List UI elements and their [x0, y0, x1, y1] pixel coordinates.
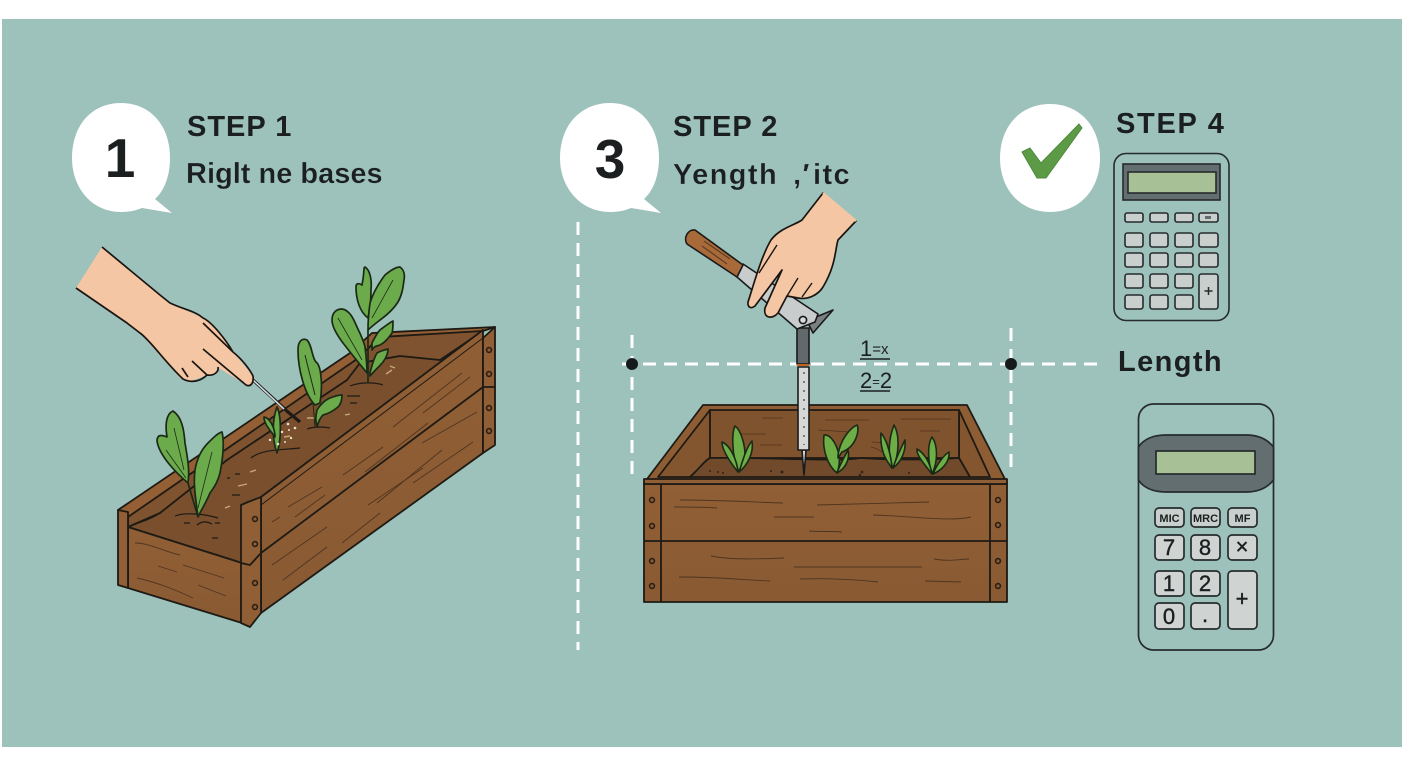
step 2 badge [560, 103, 661, 213]
number keys: + [1236, 586, 1248, 611]
step 2 subtitle: Yength [673, 159, 778, 191]
right planter seedlings [722, 425, 949, 474]
display band [1138, 435, 1274, 492]
tool shaft [797, 328, 809, 364]
tool handle [686, 230, 743, 277]
seedling 4 [332, 267, 404, 382]
wood grain [135, 373, 477, 598]
screen [1128, 172, 1216, 193]
measuring tool [686, 230, 833, 475]
number keys [1155, 534, 1257, 629]
back rim [118, 327, 495, 517]
inner back wall [128, 330, 483, 530]
calculator large [1138, 404, 1274, 650]
measurement formula: = [872, 374, 880, 389]
step 1 badge: 1 [105, 127, 135, 189]
planting tool and sparkle [253, 380, 300, 445]
tool ruler [798, 367, 809, 450]
number keys: 2 [1199, 571, 1211, 596]
number keys: 0 [1163, 604, 1175, 629]
step 1 heading: STEP 1 [187, 111, 292, 143]
left planter seedlings [157, 267, 404, 517]
step 2 heading: STEP 2 [673, 111, 778, 143]
long side panel [261, 330, 483, 613]
measurement formula: =x [872, 341, 889, 358]
left hand outline [76, 247, 253, 386]
step 2 subtitle: ,′ [793, 159, 811, 191]
step 4 check badge [1000, 104, 1100, 212]
function keys [1155, 508, 1257, 527]
right hand [748, 193, 856, 317]
function keys: MIC [1159, 513, 1180, 525]
tool spike [802, 450, 806, 475]
soil specks [709, 470, 910, 476]
short end panel [128, 527, 242, 623]
seedling 3 [298, 339, 342, 427]
tool metal arm [737, 264, 818, 329]
display [1156, 451, 1255, 474]
left hand [76, 247, 253, 386]
function keys: MF [1235, 513, 1251, 525]
label: length: Length [1118, 346, 1223, 378]
post bolts [253, 348, 491, 609]
left planter [118, 327, 495, 627]
number keys: × [1236, 534, 1248, 559]
rim and inner side walls [644, 405, 1007, 483]
right planter [644, 405, 1007, 602]
number keys: 7 [1163, 535, 1175, 560]
screen frame [1123, 164, 1220, 200]
number keys: 8 [1199, 535, 1211, 560]
keys [1125, 213, 1218, 309]
measuring guides [578, 222, 1098, 650]
soil [690, 458, 970, 477]
front bolts [650, 498, 1000, 588]
front grain [674, 500, 971, 582]
seedling d [917, 437, 949, 474]
calculator small [1114, 154, 1229, 320]
tool blade [808, 310, 833, 333]
corner posts [118, 510, 128, 588]
guide end dots [626, 358, 1017, 370]
back wall [710, 410, 959, 458]
seedling 2 [264, 407, 280, 453]
number keys: 1 [1163, 571, 1175, 596]
step 1 badge [72, 103, 172, 213]
number keys: . [1202, 602, 1208, 627]
measurement formula [860, 336, 892, 393]
measurement formula: 2 [880, 368, 892, 393]
measurement formula: 2 [860, 368, 872, 393]
seedling b [824, 425, 858, 473]
step 2 subtitle: itc [813, 159, 851, 191]
plus sign [1204, 287, 1212, 295]
measurement formula: 1 [860, 336, 872, 361]
seedling a [722, 426, 752, 472]
step 4 heading: STEP 4 [1116, 108, 1226, 140]
soil mounds [175, 383, 383, 538]
soil [128, 331, 483, 563]
seedling 1 [157, 411, 223, 517]
back wall grain [740, 418, 951, 452]
step 2 badge: 3 [595, 128, 625, 190]
seedling c [881, 425, 905, 468]
step 1 subtitle: Riglt ne bases [186, 158, 383, 190]
function keys: MRC [1193, 513, 1218, 525]
front panel [644, 484, 1007, 602]
